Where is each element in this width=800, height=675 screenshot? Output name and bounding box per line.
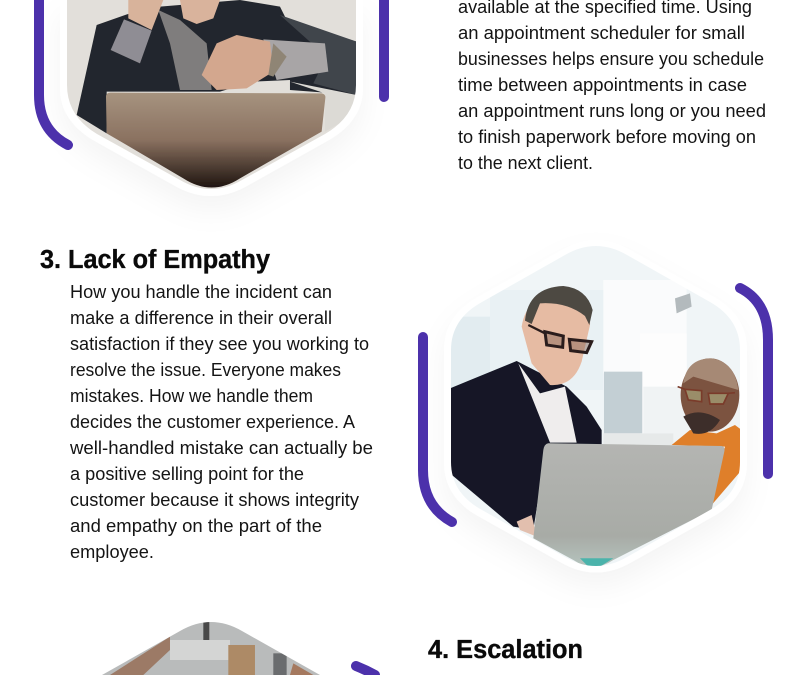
section 4 photo: partially visible office scene xyxy=(102,622,320,675)
section 3 body text: resolve the issue. Everyone makes xyxy=(70,360,341,380)
section 2 body text: an appointment runs long or you need xyxy=(458,101,766,121)
heading: 3. Lack of Empathy: 3. Lack of Empathy xyxy=(40,246,271,274)
section 3 body text: satisfaction if they see you working to xyxy=(70,334,369,354)
section 3 accent bar right xyxy=(740,288,768,474)
section 3 body text: employee. xyxy=(70,542,154,562)
section 3 body text: make a difference in their overall xyxy=(70,308,332,328)
section 3 body text: and empathy on the part of the xyxy=(70,516,322,536)
section 2 accent bar right xyxy=(379,0,389,97)
section 2 accent bar left xyxy=(39,0,68,145)
section 3 accent bar left xyxy=(423,337,452,522)
section 2 body text: to the next client. xyxy=(458,153,593,173)
heading: 4. Escalation: 4. Escalation xyxy=(428,636,583,664)
section 3 body text: a positive selling point for the xyxy=(70,464,304,484)
section 4 accent bar right xyxy=(356,666,375,675)
section 2 photo: man checking watch xyxy=(60,0,363,203)
section 2 body text: an appointment scheduler for small xyxy=(458,23,745,43)
section 3 body text: well-handled mistake can actually be xyxy=(69,438,373,458)
section 3 body text: customer because it shows integrity xyxy=(70,490,359,510)
section 3 body text: How you handle the incident can xyxy=(70,282,332,302)
section 2 body text: to finish paperwork before moving on xyxy=(458,127,756,147)
section 3 body text xyxy=(69,282,373,562)
section 3 body text: decides the customer experience. A xyxy=(70,412,355,432)
section 2 body text: time between appointments in case xyxy=(458,75,747,95)
section 2 body text xyxy=(458,0,766,173)
section 3 photo: two colleagues at a laptop xyxy=(443,237,747,573)
section 2 body text: businesses helps ensure you schedule xyxy=(458,49,764,69)
section 3 body text: mistakes. How we handle them xyxy=(70,386,313,406)
